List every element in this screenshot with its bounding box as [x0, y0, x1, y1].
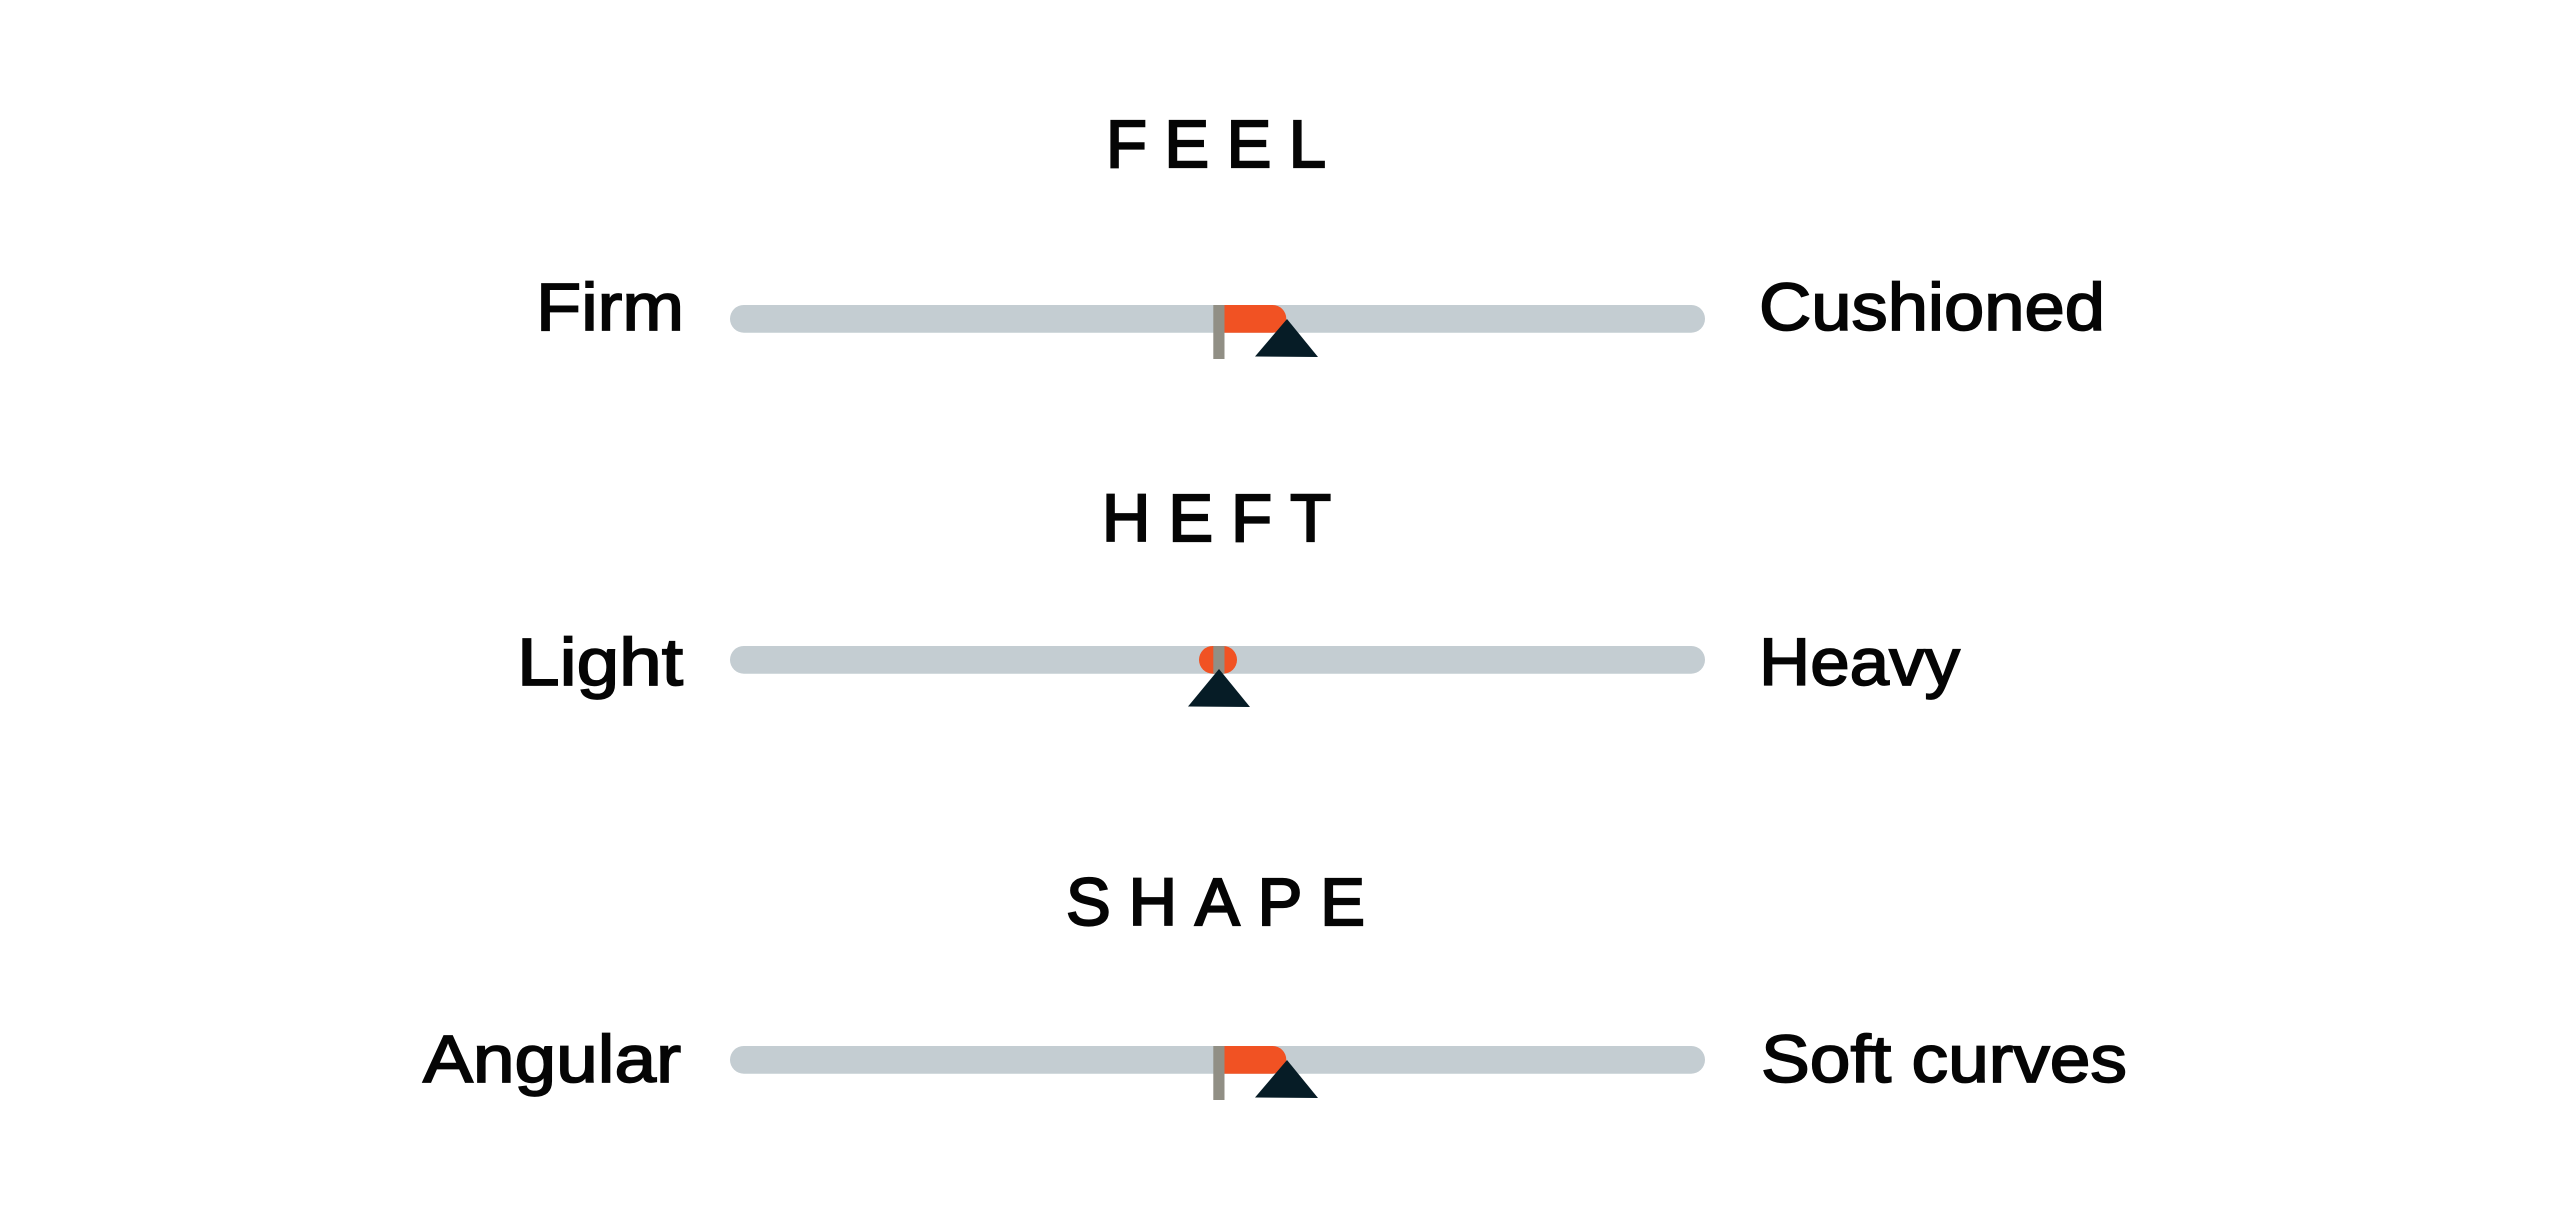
pointer triangle: feel	[1255, 319, 1318, 357]
heading: shape: SHAPE	[1066, 865, 1365, 940]
offset bar: shape	[1224, 1046, 1286, 1074]
scale track: heft	[730, 646, 1705, 674]
heading: feel: FEEL	[1106, 107, 1326, 182]
offset bar: heft	[1199, 646, 1237, 674]
center marker: heft	[1213, 646, 1224, 674]
pointer triangle: heft	[1188, 669, 1250, 707]
offset bar: feel	[1224, 305, 1286, 333]
panel: feel	[536, 107, 2105, 359]
pointer triangle: shape	[1255, 1060, 1318, 1098]
label: firm: Firm	[536, 270, 684, 345]
scale track: feel	[730, 305, 1705, 333]
label: heavy: Heavy	[1759, 625, 1961, 700]
center marker: feel	[1213, 305, 1224, 359]
label: angular: Angular	[423, 1022, 681, 1097]
label: soft curves: Soft curves	[1761, 1022, 2127, 1097]
label: light: Light	[517, 625, 683, 700]
label: cushioned: Cushioned	[1759, 270, 2105, 345]
center marker: shape	[1213, 1046, 1224, 1100]
panel: heft	[517, 481, 1961, 707]
scale track: shape	[730, 1046, 1705, 1074]
panel: shape	[423, 865, 2127, 1100]
heading: heft: HEFT	[1102, 481, 1331, 556]
